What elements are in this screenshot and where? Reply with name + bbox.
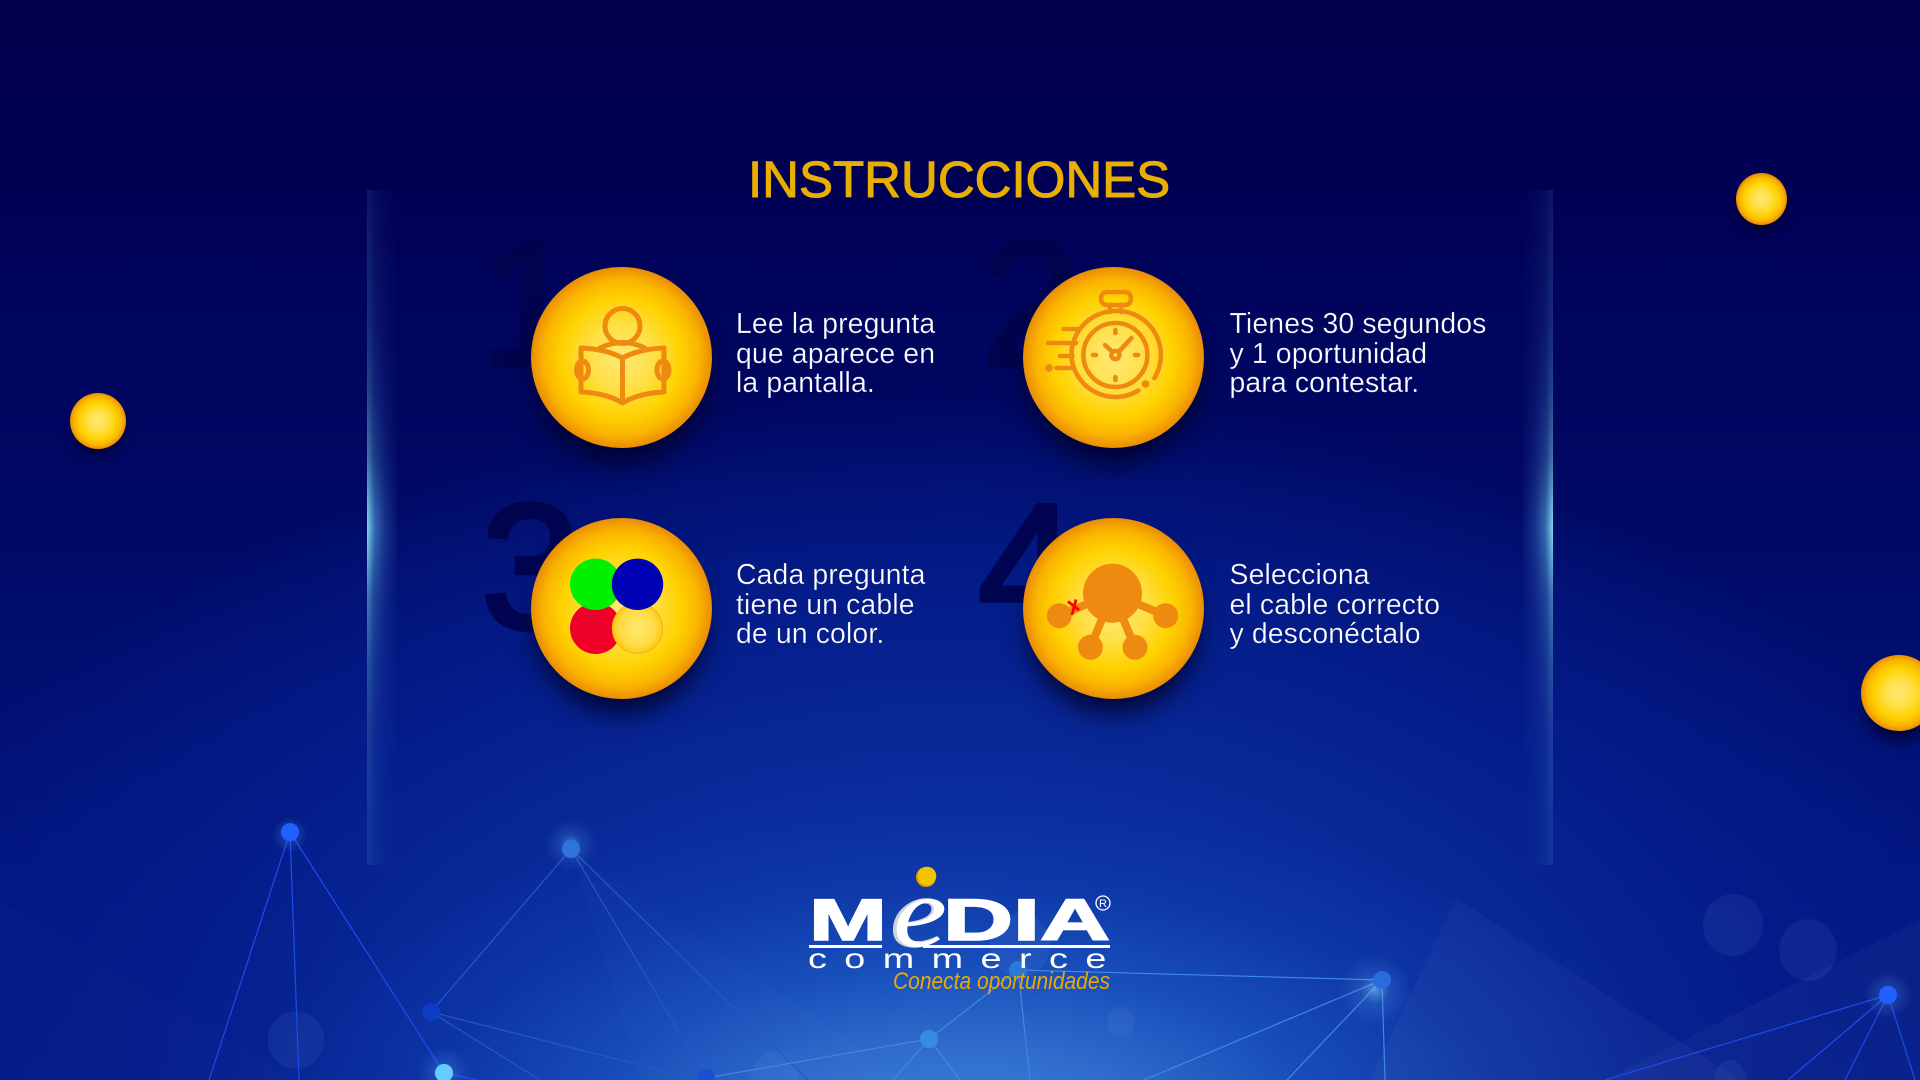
logo tagline: Conecta oportunidades — [893, 968, 1110, 995]
step 4 text: y desconéctalo — [1230, 618, 1421, 650]
logo wordmark: R — [1099, 898, 1107, 910]
right side light panel — [1521, 190, 1553, 865]
ghost number 2: 2 — [981, 204, 1080, 403]
step 4 icon: cable hub — [1023, 518, 1204, 699]
step 4 text — [1230, 559, 1440, 650]
title: INSTRUCCIONES — [748, 151, 1170, 208]
step 2 text: para contestar. — [1230, 367, 1419, 399]
step 2 text — [1230, 308, 1486, 399]
logo wordmark — [809, 857, 1110, 968]
step 3 text: de un color. — [736, 618, 884, 650]
logo wordmark: e — [890, 857, 946, 968]
logo wordmark: M — [809, 888, 887, 953]
decorative ball: right edge — [1861, 655, 1920, 731]
decorative ball: top right — [1736, 173, 1787, 225]
step 1 icon: person reading — [531, 267, 712, 448]
logo wordmark: e — [893, 857, 947, 968]
step 1 text: Lee la pregunta — [736, 308, 935, 340]
step 2 text: Tienes 30 segundos — [1230, 308, 1486, 340]
step 1 text: que aparece en — [736, 338, 935, 370]
step 2 text: y 1 oportunidad — [1230, 338, 1427, 370]
decorative ball: left — [70, 393, 126, 449]
step 2 icon: stopwatch — [1023, 267, 1204, 448]
step 1 text: la pantalla. — [736, 367, 875, 399]
ghost number 4: 4 — [978, 467, 1077, 666]
step 4 text: Selecciona — [1230, 559, 1370, 591]
logo commerce line: commerce — [808, 944, 1106, 975]
step 3 text: tiene un cable — [736, 588, 915, 620]
step 3 text: Cada pregunta — [736, 559, 926, 591]
logo dot — [916, 867, 936, 887]
step 4 text: el cable correcto — [1230, 588, 1440, 620]
step 3 icon: coloured cables — [531, 518, 712, 699]
ghost number 3: 3 — [481, 467, 580, 666]
logo wordmark: DIA — [943, 888, 1110, 953]
ghost number 1: 1 — [479, 204, 578, 403]
step 1 text — [736, 308, 936, 399]
step 3 text — [736, 559, 926, 650]
left side light panel — [367, 190, 399, 865]
logo: Media Commerce — [808, 857, 1111, 995]
